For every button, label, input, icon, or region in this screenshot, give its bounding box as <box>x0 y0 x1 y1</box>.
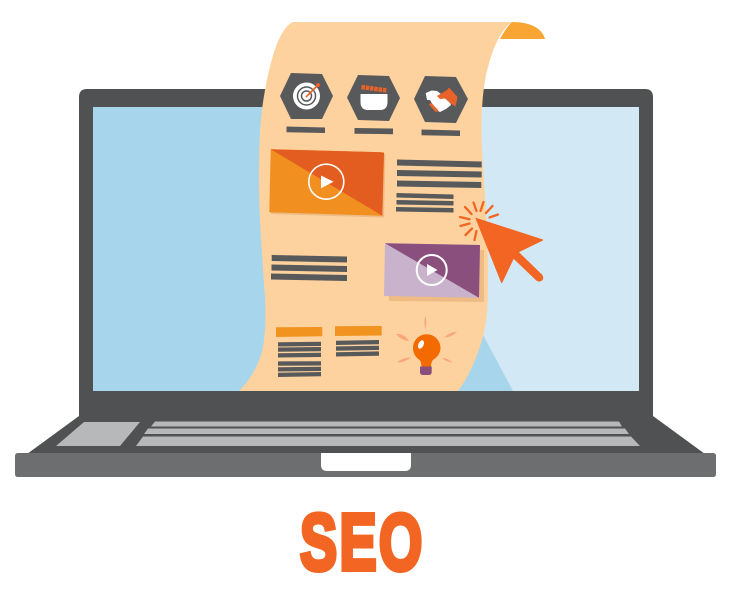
icon: light bulb <box>396 316 457 375</box>
trackpad <box>56 422 140 446</box>
label bar <box>286 126 325 133</box>
text block <box>278 342 321 377</box>
laptop screen <box>93 107 639 391</box>
paper sheet <box>239 22 512 391</box>
arrow <box>476 218 543 283</box>
icon: clapperboard <box>347 75 400 121</box>
laptop <box>15 89 716 477</box>
video thumbnail: purple <box>384 243 484 302</box>
paper fold <box>500 22 545 39</box>
title: SEO <box>300 498 425 587</box>
laptop base strip <box>15 453 716 477</box>
icon: target <box>280 73 333 119</box>
text block <box>396 160 482 212</box>
text block <box>336 340 379 356</box>
base notch <box>321 453 411 471</box>
video thumbnail: orange <box>269 149 386 218</box>
column headers <box>276 326 382 337</box>
click rays <box>460 202 498 240</box>
text block <box>271 255 347 281</box>
keyboard keys <box>136 422 640 446</box>
cursor arrow <box>460 202 543 283</box>
icon: handshake <box>414 76 468 123</box>
label bar <box>422 130 460 136</box>
paper scroll <box>239 22 545 391</box>
label bar <box>354 128 393 134</box>
laptop lid <box>79 89 653 432</box>
laptop keyboard deck <box>27 416 705 454</box>
